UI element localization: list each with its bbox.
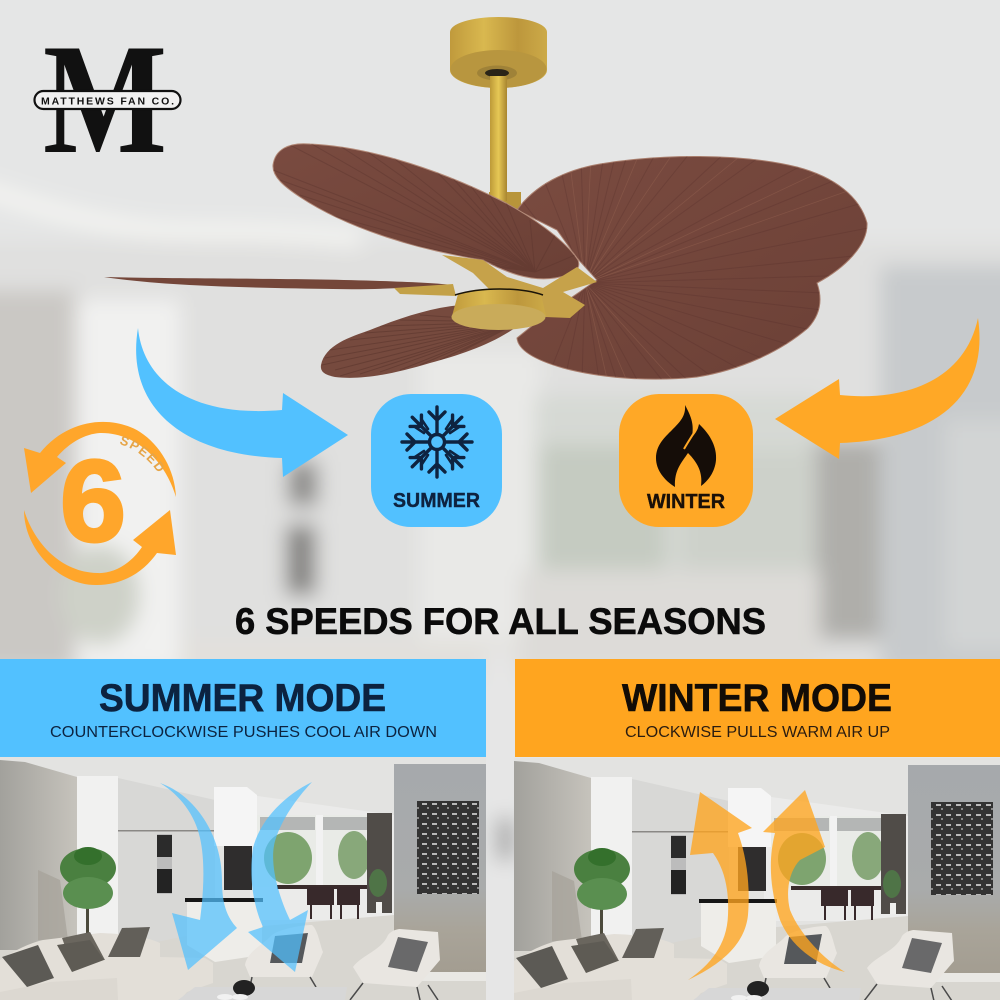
word speed: SPEED	[120, 436, 164, 472]
blade: thin left	[104, 277, 452, 289]
arrow: orange to winter	[775, 318, 980, 459]
icon: snowflake	[402, 407, 472, 477]
logo: Matthews Fan Co.: M	[43, 12, 167, 187]
panel: winter mode: WINTER MODE	[622, 677, 892, 720]
motor housing	[452, 289, 546, 330]
panel: summer mode: SUMMER MODE	[99, 677, 386, 720]
icon: 6 speed	[24, 422, 176, 585]
room photo: summer	[0, 757, 486, 1000]
badge: winter	[619, 394, 753, 527]
arrows: warm air up	[688, 790, 845, 980]
badge: summer	[371, 394, 502, 527]
ceiling fan	[104, 17, 868, 380]
arrows: cool air down	[160, 782, 312, 972]
icon: flame	[656, 405, 716, 487]
arrow: blue to summer	[136, 328, 348, 477]
panel: summer mode: COUNTERCLOCKWISE PUSHES COOL AIR DOWN	[50, 724, 437, 741]
blade brackets	[442, 255, 597, 318]
blade: upper left	[273, 143, 579, 279]
badge: summer: SUMMER	[393, 490, 481, 512]
circular arrow top	[24, 422, 176, 497]
blade: large right	[516, 156, 868, 380]
numeral 6: 6	[60, 436, 126, 566]
fan downrod and canopy	[450, 17, 547, 212]
blade: bottom left	[321, 305, 520, 378]
room photo: winter	[514, 758, 1000, 1000]
heading: 6 SPEEDS FOR ALL SEASONS	[235, 601, 766, 642]
badge: winter: WINTER	[647, 491, 726, 513]
panel: winter mode	[515, 659, 1000, 757]
panel: summer mode	[0, 659, 486, 757]
circular arrow bottom	[24, 510, 176, 585]
logo: Matthews Fan Co.: MATTHEWS FAN CO.	[41, 96, 174, 108]
panel: winter mode: CLOCKWISE PULLS WARM AIR UP	[625, 724, 890, 741]
